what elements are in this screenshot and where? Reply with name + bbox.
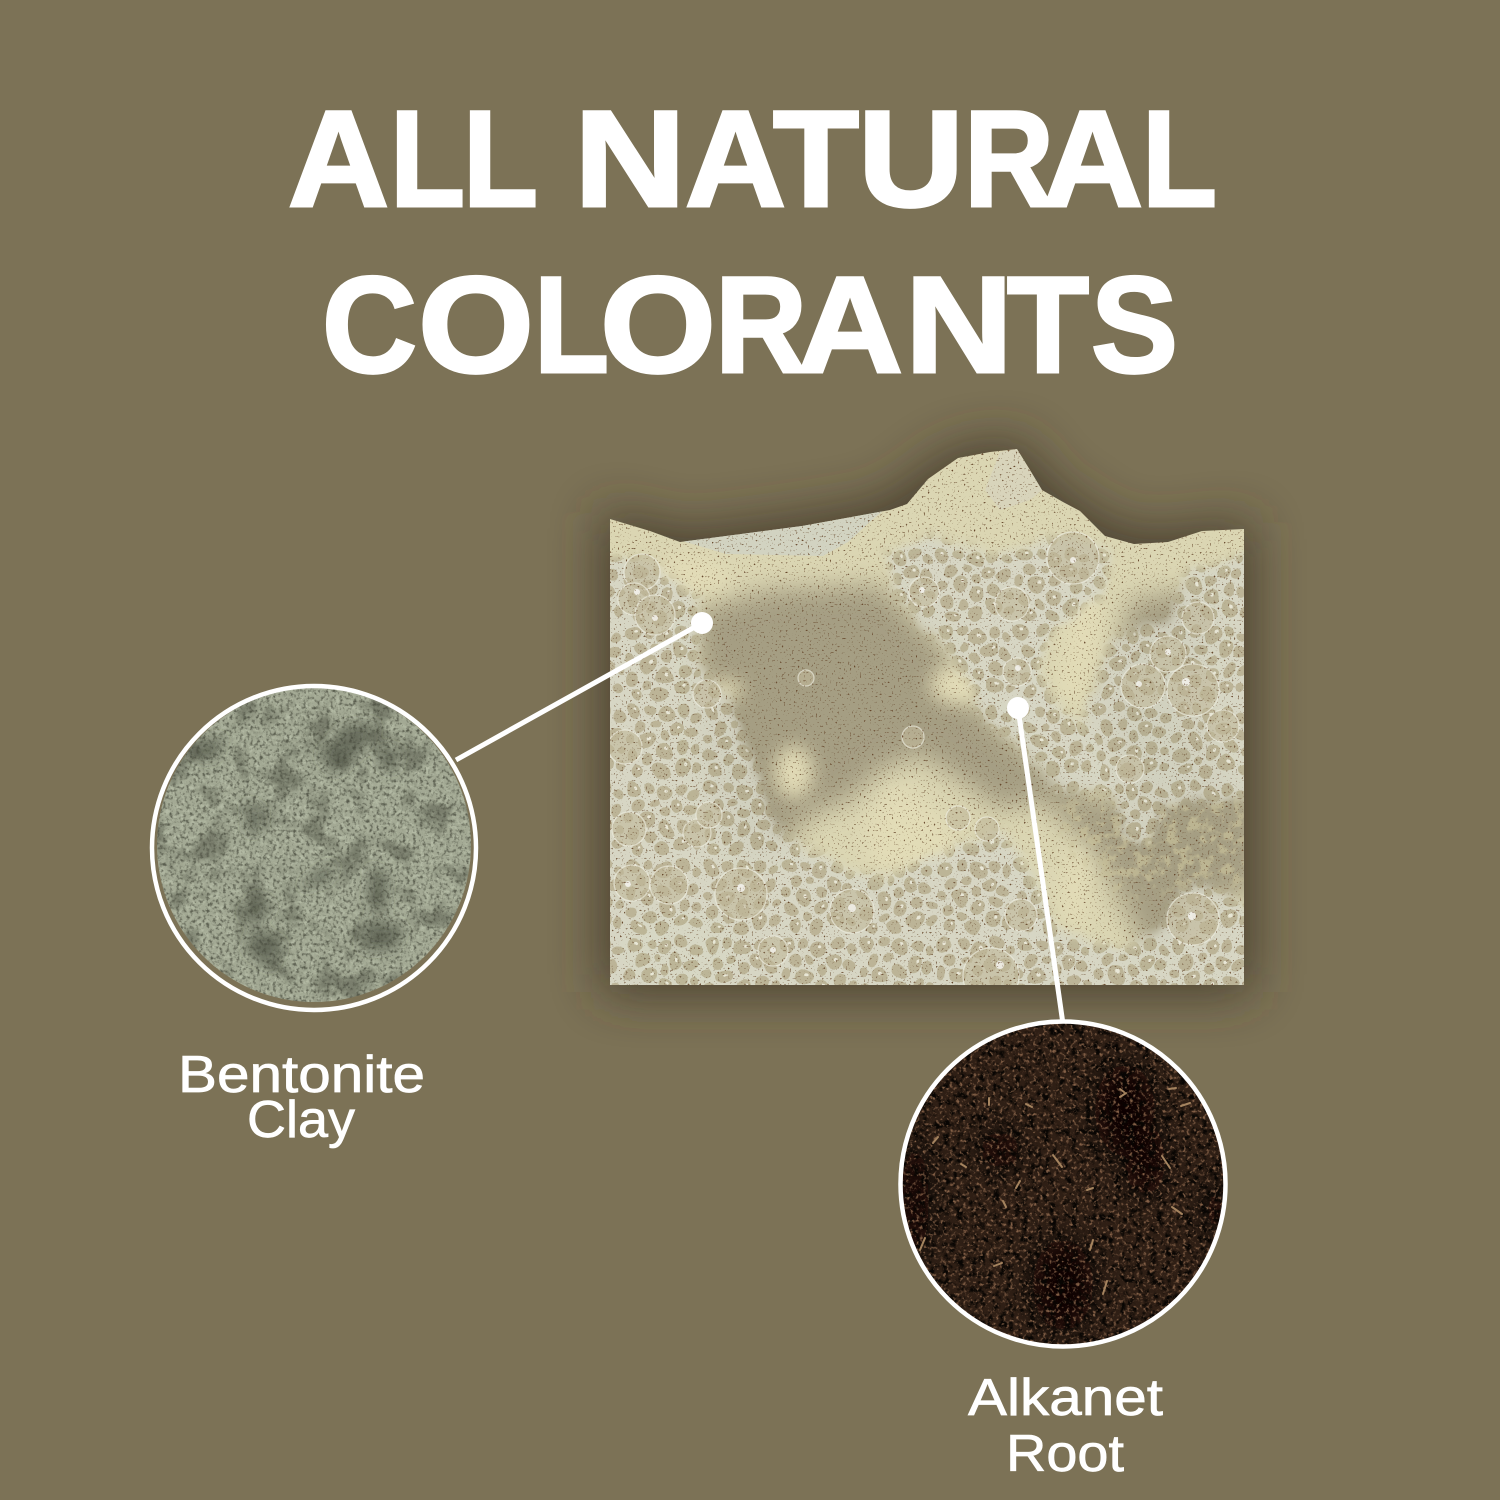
title: U <box>858 83 964 236</box>
title: C <box>322 249 417 402</box>
callout line: alkanet root <box>1007 697 1063 1024</box>
title: N <box>574 83 686 236</box>
title: T <box>1007 249 1089 402</box>
patchy pale texture over lower-right swirl <box>1064 800 1244 898</box>
large bubbles <box>608 532 1239 1004</box>
title <box>288 83 1217 402</box>
callout line: bentonite clay <box>456 612 713 760</box>
soap drop shadow <box>610 449 1244 985</box>
label: Alkanet Root: Root <box>1006 1425 1125 1483</box>
bubble glints <box>625 557 1196 969</box>
title: R <box>715 249 807 402</box>
icon: bentonite clay powder circle <box>150 680 480 1010</box>
grey clay swirl <box>695 585 1260 960</box>
title: A <box>685 83 786 236</box>
title: A <box>797 249 903 402</box>
label: Bentonite Clay: Clay <box>247 1091 355 1149</box>
icon: alkanet root powder circle <box>895 1015 1235 1355</box>
cream patches <box>712 660 1088 884</box>
label: Alkanet Root <box>968 1369 1164 1483</box>
title: L <box>463 83 538 236</box>
title: A <box>288 83 389 236</box>
title: O <box>600 249 716 402</box>
label: Bentonite Clay <box>178 1046 425 1149</box>
foam regions <box>610 532 1244 985</box>
title: N <box>905 249 1013 402</box>
panel: soap bar with lather <box>600 440 1260 1004</box>
title: O <box>418 249 534 402</box>
title: A <box>1042 83 1143 236</box>
title: T <box>773 83 859 236</box>
soap knob highlight <box>1015 449 1042 490</box>
title: R <box>964 83 1054 236</box>
root fibres <box>920 1088 1190 1294</box>
title: L <box>390 83 465 236</box>
title: L <box>1142 83 1217 236</box>
back sliver of soap top <box>684 511 882 556</box>
title: S <box>1091 249 1178 402</box>
brown flecks <box>600 440 1260 1000</box>
title: L <box>534 249 609 402</box>
label: Bentonite Clay: Bentonite <box>178 1046 425 1104</box>
soap base <box>600 440 1260 1000</box>
label: Alkanet Root: Alkanet <box>968 1369 1164 1427</box>
